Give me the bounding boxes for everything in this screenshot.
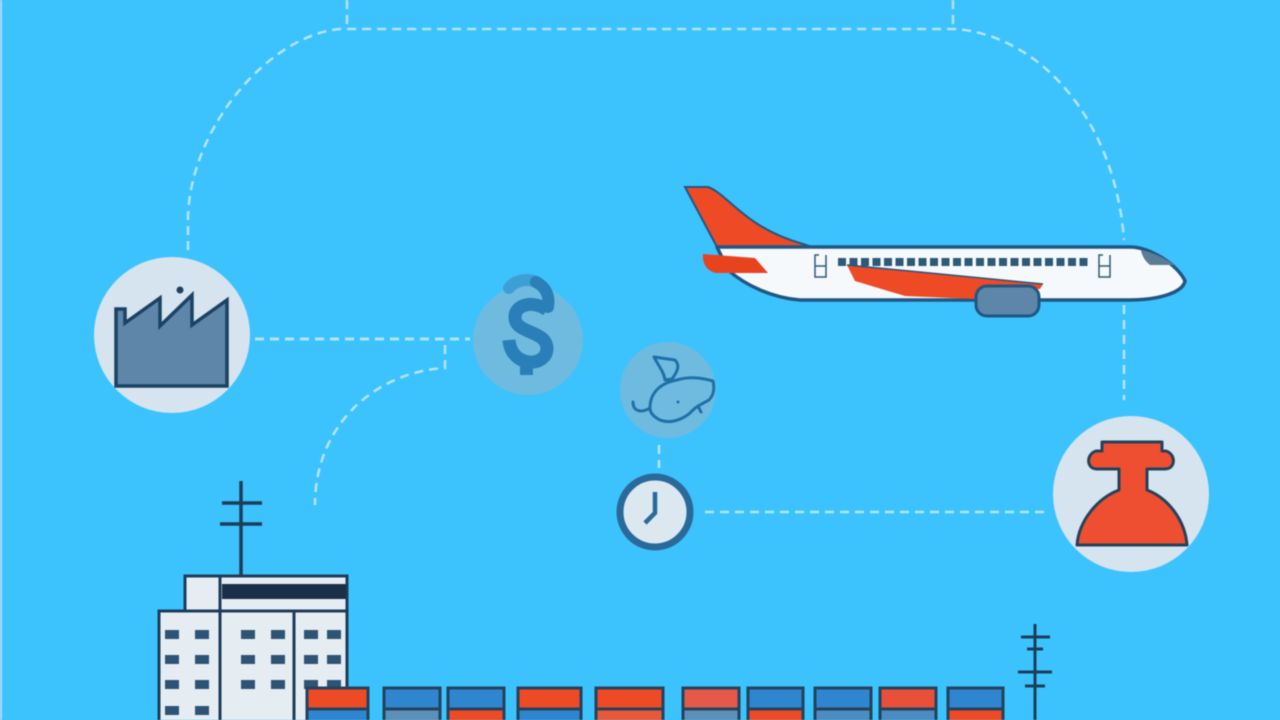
airplane: [685, 187, 1185, 316]
icon: clock: [620, 477, 690, 547]
shipping containers: [307, 688, 1003, 720]
wing: [847, 265, 1043, 299]
doors: [815, 255, 1110, 277]
radio tower: [1018, 624, 1052, 720]
icon: fish: [620, 342, 716, 438]
cabin windows: [838, 258, 1088, 266]
lower storey: [159, 611, 347, 720]
antenna: [220, 481, 262, 575]
building with antenna: [159, 481, 347, 720]
fuselage: [717, 247, 1185, 300]
windows: [165, 630, 341, 715]
icon: factory: [94, 257, 250, 413]
icon: dollar sign: [473, 280, 583, 395]
dashed route lines: [188, 0, 1124, 512]
engine: [976, 286, 1039, 316]
upper storey: [185, 576, 347, 612]
cockpit window: [1141, 250, 1174, 265]
rear stabilizer: [703, 254, 768, 273]
tail fin: [685, 187, 812, 247]
icon: flask: [1053, 416, 1209, 572]
